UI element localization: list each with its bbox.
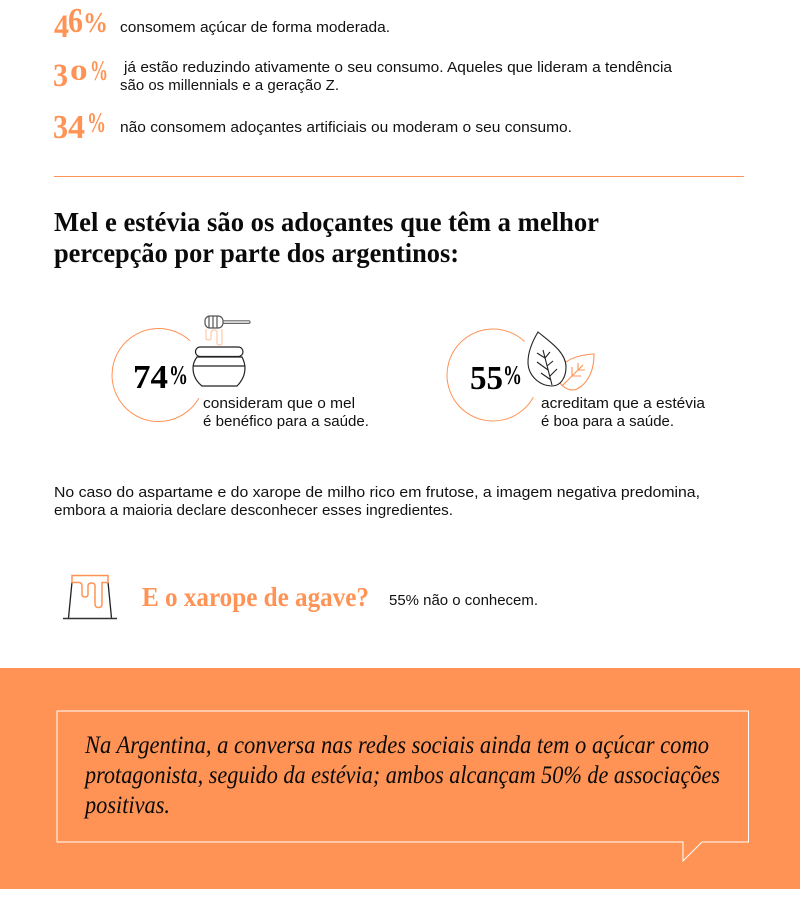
stat: 46%: consomem açúcar de forma moderada.: [120, 19, 390, 36]
stat: 34%: %: [87, 108, 106, 139]
panel: quote band: [0, 668, 800, 889]
circle arc: honey: [112, 329, 199, 422]
caption: honey: consideram que o mel: [203, 395, 355, 412]
stat: 46%: %: [83, 8, 108, 39]
value: 55%: [470, 360, 522, 397]
paragraph: aspartame and corn syrup: embora a maioria declare desconhecer esses ingredientes.: [54, 502, 453, 519]
value: 74%: [133, 359, 188, 396]
quote text: positivas.: [83, 792, 170, 819]
caption: stevia: acreditam que a estévia: [541, 395, 706, 412]
stat: 46%: 6: [68, 1, 83, 40]
stat: 30%: 3: [53, 58, 68, 94]
heading: percepção por parte dos argentinos:: [54, 238, 459, 268]
icon: honey jar: [193, 316, 250, 386]
stat: 34%: não consomem adoçantes artificiais ou moderam o seu consumo.: [120, 119, 572, 136]
value: 55%: %: [503, 360, 522, 390]
quote text: Na Argentina, a conversa nas redes sociais ainda tem o açúcar como: [84, 732, 709, 759]
stat: 34%: 4: [68, 109, 85, 146]
speech bubble: [57, 711, 748, 861]
stat: honey 74%: [112, 316, 369, 430]
icon: stevia leaves: [528, 332, 594, 390]
text: agave: 55% não o conhecem.: [389, 592, 538, 609]
value: 55%: 55: [470, 360, 503, 397]
stat: 30%: 0: [70, 61, 88, 85]
stat: 30%: são os millennials e a geração Z.: [120, 77, 339, 94]
paragraph: aspartame and corn syrup: [54, 484, 700, 519]
heading: Mel e estévia são os adoçantes que têm a melhor: [54, 207, 599, 237]
quote text: protagonista, seguido da estévia; ambos alcançam 50% de associações: [83, 762, 720, 789]
quote text: [83, 732, 720, 819]
value: 74%: %: [169, 360, 188, 390]
heading: agave: E o xarope de agave?: [142, 582, 369, 612]
stat: stevia 55%: [447, 329, 706, 430]
stat: 46%: [54, 1, 390, 45]
paragraph: aspartame and corn syrup: No caso do aspartame e do xarope de milho rico em frutose, a imagem negativa predomina,: [54, 484, 700, 501]
agave row: [63, 576, 538, 618]
caption: honey: é benéfico para a saúde.: [203, 413, 369, 430]
caption: stevia: [541, 395, 706, 430]
stat: 34%: [53, 108, 572, 146]
stat: 30%: [53, 56, 673, 94]
stat: 30%: %: [90, 56, 108, 87]
value: 74%: 74: [133, 359, 168, 396]
heading: [54, 207, 599, 268]
caption: honey: [203, 395, 369, 430]
circle arc: stevia: [447, 329, 533, 421]
stat: 30%: já estão reduzindo ativamente o seu consumo. Aqueles que lideram a tendência: [123, 59, 673, 76]
stat: 34%: 3: [53, 109, 68, 146]
caption: stevia: é boa para a saúde.: [541, 413, 674, 430]
icon: agave syrup cup: [63, 576, 117, 618]
stat: 46%: 4: [54, 9, 69, 45]
